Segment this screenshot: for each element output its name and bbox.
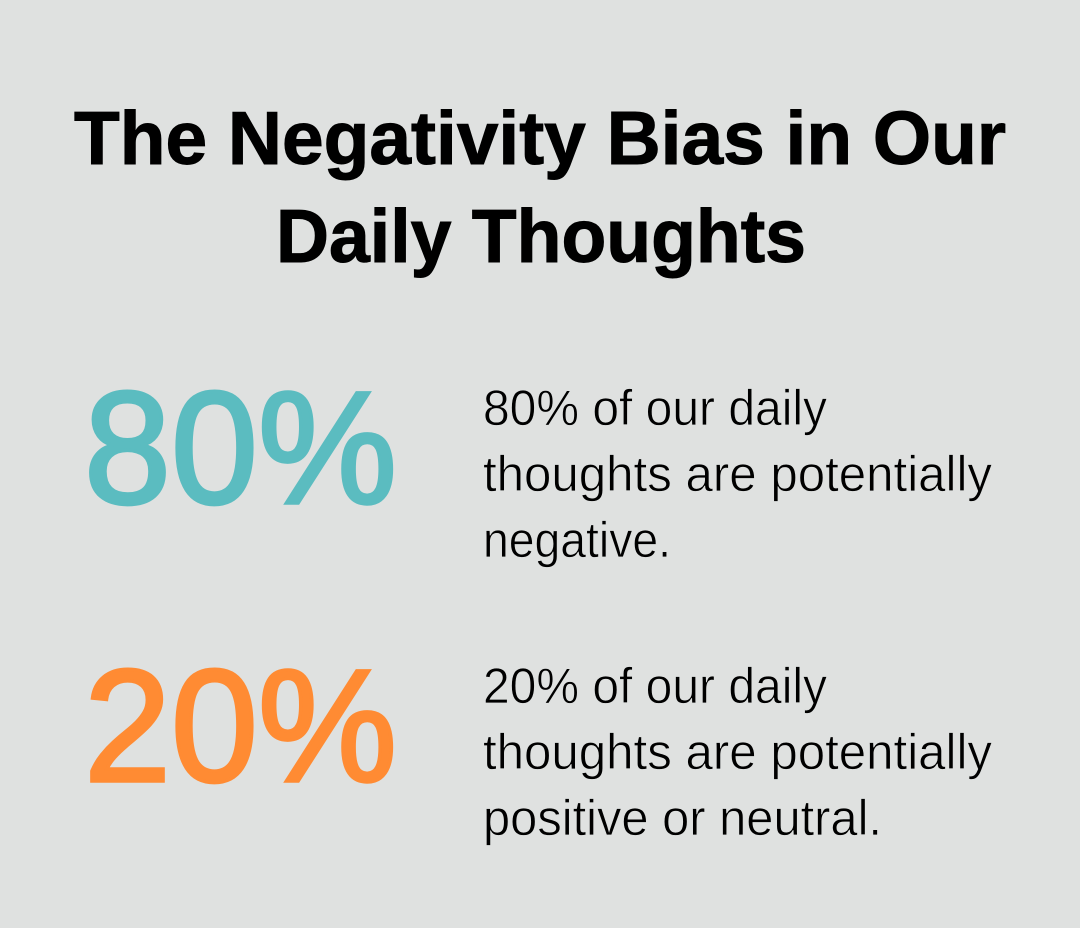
text block: 80% description: negative. <box>483 512 671 568</box>
text block: 20% description <box>483 658 992 846</box>
stat: 20%: 20% <box>84 636 397 815</box>
stat: 80%: 80% <box>84 358 397 537</box>
text block: 20% description: 20% of our daily <box>483 658 827 714</box>
text block: 80% description <box>483 380 992 568</box>
text block: 80% description: thoughts are potentially <box>483 446 992 502</box>
title <box>74 96 1006 278</box>
title: The Negativity Bias in Our <box>74 96 1006 180</box>
text block: 20% description: thoughts are potentially <box>483 724 992 780</box>
text block: 80% description: 80% of our daily <box>483 380 827 436</box>
title: Daily Thoughts <box>276 194 806 278</box>
text block: 20% description: positive or neutral. <box>483 790 882 846</box>
